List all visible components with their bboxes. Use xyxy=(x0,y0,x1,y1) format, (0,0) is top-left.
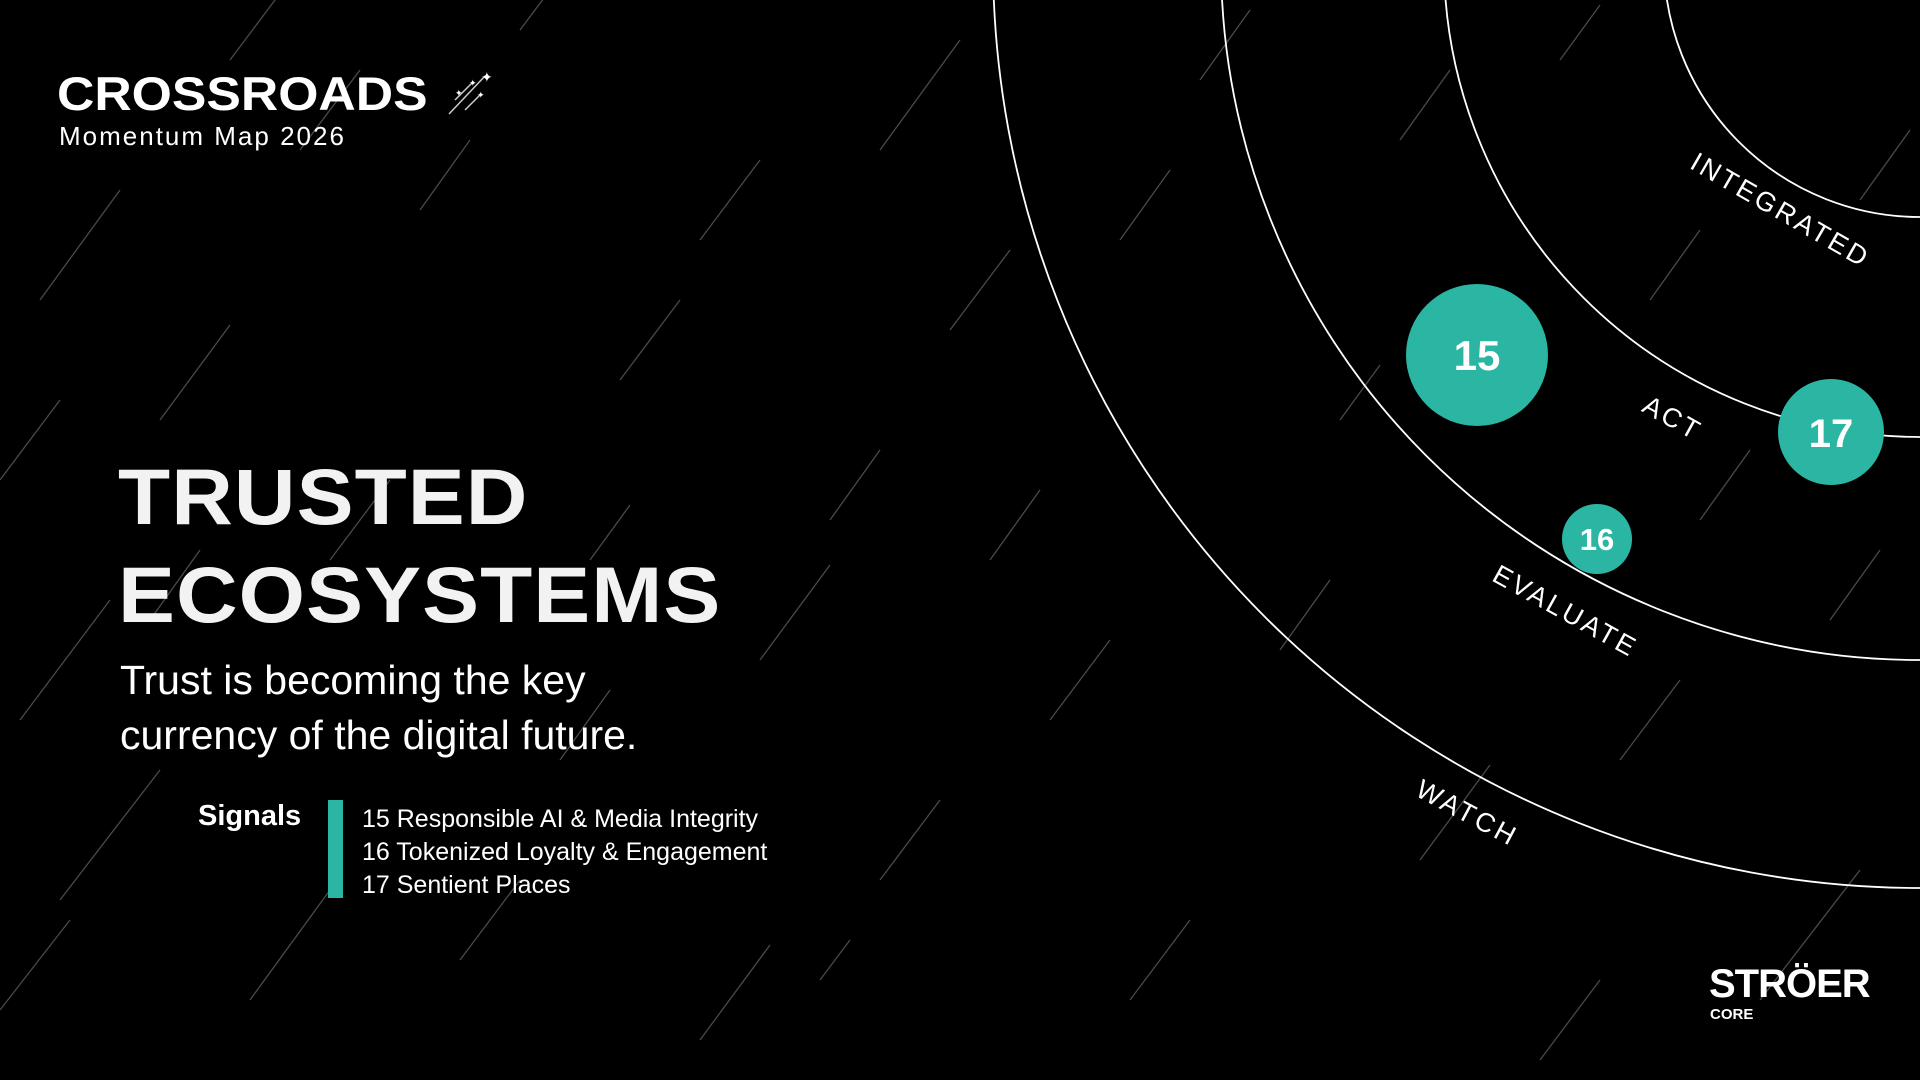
ring labels: ACT xyxy=(1638,390,1707,447)
title: TRUSTED xyxy=(118,452,528,541)
icon: shooting stars: ✦ xyxy=(477,90,485,100)
icon: shooting stars: ✦ xyxy=(469,78,477,88)
ring labels: INTEGRATED xyxy=(1686,147,1875,274)
signal bubbles: 16 xyxy=(1580,522,1614,557)
icon: shooting stars xyxy=(448,70,493,114)
brand logo: CORE xyxy=(1710,1006,1753,1023)
signals list: 15 Responsible AI & Media Integrity xyxy=(362,805,758,833)
signal bubbles: 17 xyxy=(1809,412,1853,456)
subtitle xyxy=(120,657,637,758)
title: ECOSYSTEMS xyxy=(118,550,721,639)
header logo: CROSSROADS xyxy=(57,67,428,120)
subtitle: Trust is becoming the key xyxy=(120,657,586,703)
signals list: 16 Tokenized Loyalty & Engagement xyxy=(362,838,767,866)
signals list: Signals xyxy=(198,800,301,832)
ring labels: WATCH xyxy=(1411,774,1523,852)
ring labels xyxy=(1411,147,1875,852)
signal bubbles: 15 xyxy=(1454,332,1500,379)
brand logo: STRÖER xyxy=(1709,962,1870,1006)
ring labels: EVALUATE xyxy=(1488,559,1643,663)
subtitle: currency of the digital future. xyxy=(120,712,637,758)
header logo: Momentum Map 2026 xyxy=(59,121,346,151)
signals list xyxy=(198,800,768,899)
title xyxy=(118,452,721,639)
header logo xyxy=(57,67,493,151)
signal bubbles xyxy=(1406,284,1884,574)
signals list: 17 Sentient Places xyxy=(362,871,570,899)
icon: shooting stars: ✦ xyxy=(455,88,463,98)
